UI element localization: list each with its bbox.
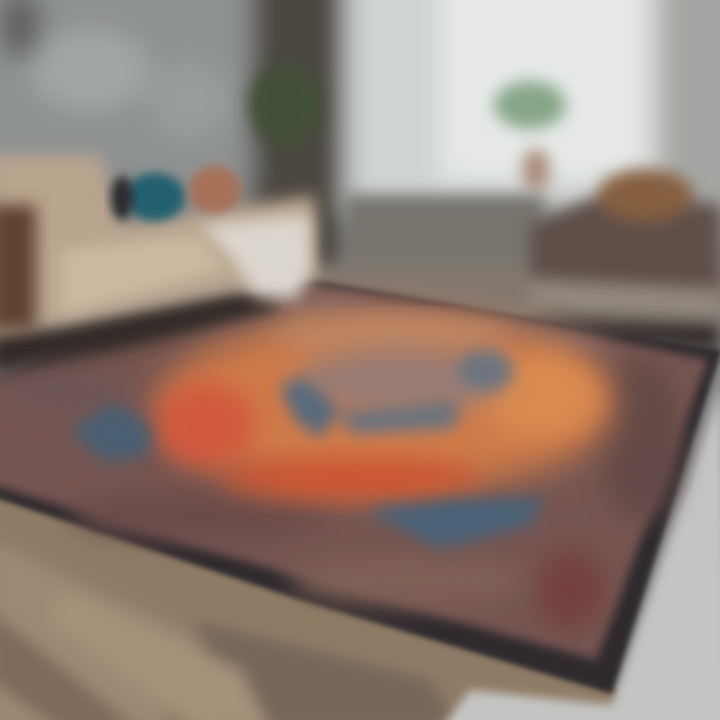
teal cushion — [125, 173, 185, 221]
sofa — [0, 155, 315, 375]
sofa arm — [0, 205, 36, 330]
sofa shadow — [0, 288, 285, 375]
orange cushion — [189, 166, 241, 214]
back floor and far furniture — [310, 195, 720, 315]
rug upper band — [180, 295, 620, 360]
background wall and window — [0, 0, 720, 280]
rug — [0, 280, 720, 694]
dark cushion — [111, 176, 133, 220]
orange medallion — [155, 317, 613, 498]
rug field — [0, 284, 708, 660]
sofa seat highlight — [60, 235, 225, 315]
blue motifs — [70, 350, 545, 548]
sofa body — [0, 155, 315, 335]
medallion centre — [295, 348, 505, 412]
rug dark border — [0, 280, 720, 694]
armchair — [530, 169, 720, 352]
light floor right — [440, 385, 720, 720]
white throw — [200, 215, 312, 300]
wood floor — [0, 490, 620, 720]
rug lower pattern band — [0, 360, 680, 630]
potted plants — [249, 63, 566, 190]
